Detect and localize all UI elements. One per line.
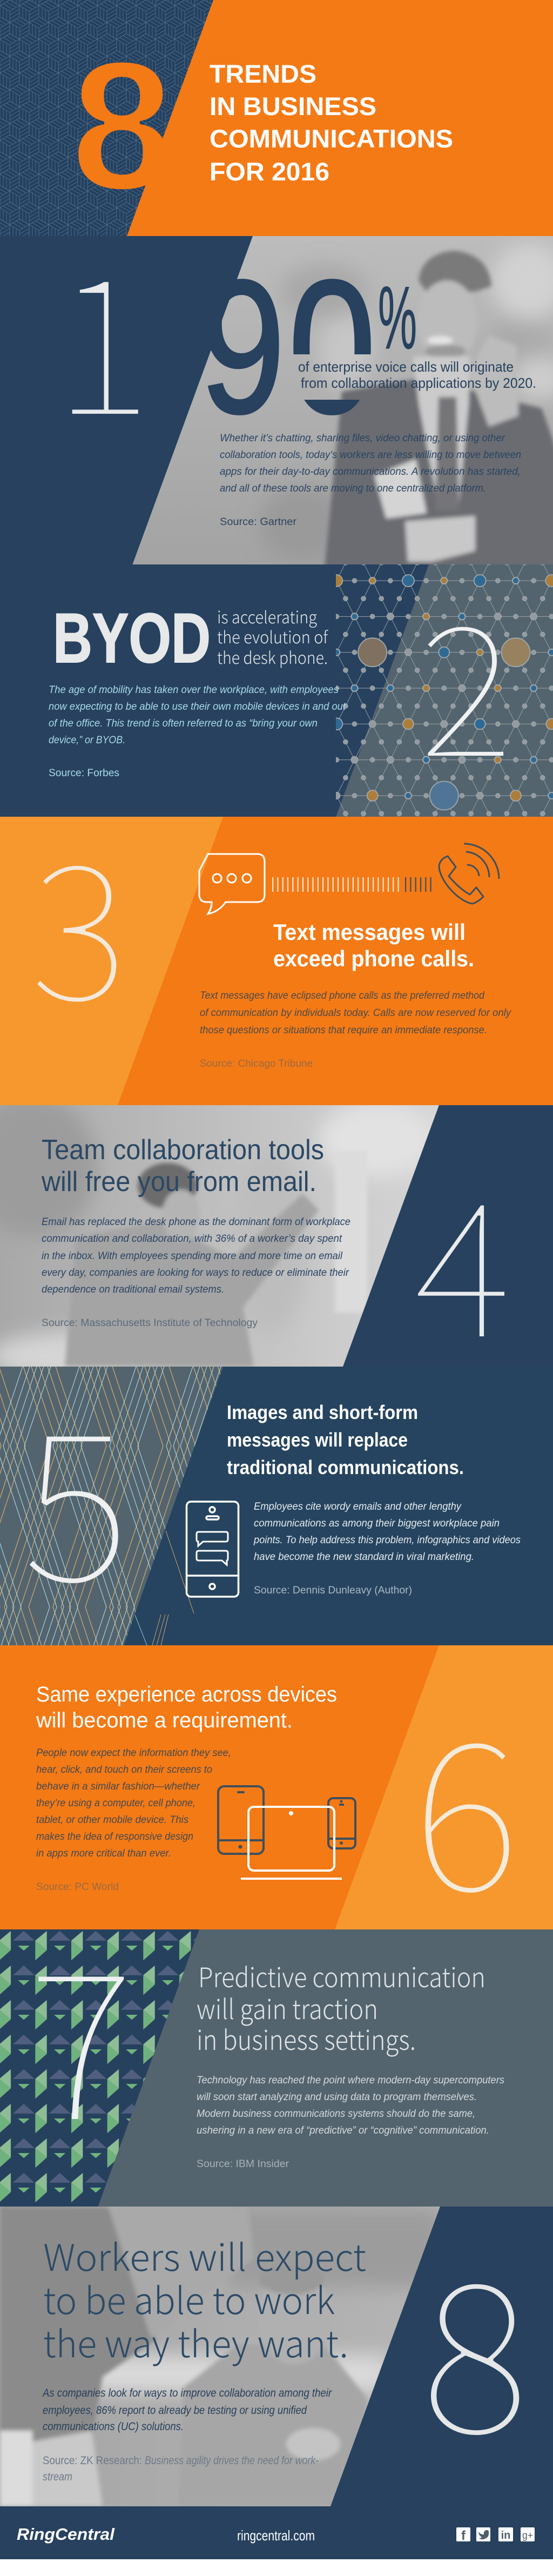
icon: linkedin (498, 2527, 513, 2541)
body text: collaboration tools, today’s workers are less willing to move between (220, 449, 521, 461)
navy diagonal panel (331, 2207, 553, 2506)
stray accent lines (135, 1531, 194, 1645)
body text (49, 684, 346, 746)
icon: facebook: f (461, 2528, 466, 2543)
heading: the desk phone. (217, 644, 328, 669)
body text: Technology has reached the point where modern-day supercomputers (197, 2074, 504, 2086)
heading: the way they want. (43, 2315, 348, 2368)
footer (0, 2506, 553, 2559)
BYOD wordmark: BYOD (53, 598, 211, 677)
source: Source: PC World (36, 1881, 119, 1893)
heading: Workers will expect (43, 2228, 366, 2282)
heading (217, 604, 329, 669)
photo: businessman on phone (133, 236, 553, 564)
signal bars (272, 877, 435, 892)
body text: Text messages have eclipsed phone calls as the preferred method (200, 990, 485, 1001)
triangle pattern panel (0, 1929, 199, 2207)
stat caption: of enterprise voice calls will originate (298, 359, 514, 375)
panel: trend 3 (0, 781, 553, 1105)
navy background (0, 1367, 553, 1645)
chevron line pattern (0, 1367, 227, 1645)
stat: 90 percent: 9 (200, 241, 285, 453)
title (210, 59, 453, 186)
icon: phone handset (439, 844, 499, 904)
photo: man at whiteboard (0, 1105, 439, 1367)
photo: two workers (0, 2207, 440, 2506)
numeral 4: 4 (414, 1118, 512, 1392)
body text (42, 1216, 350, 1295)
icon: chat bubble (199, 854, 265, 914)
body text: employees, 86% report to already be testing or using unified (43, 2404, 307, 2417)
orange title panel (127, 0, 553, 236)
numeral 3: 3 (30, 781, 128, 1055)
body text: People now expect the information they see, (36, 1747, 231, 1759)
body text: communications as among their biggest workplace pain (254, 1517, 500, 1529)
stat caption: from collaboration applications by 2020. (301, 375, 536, 391)
navy diagonal panel (343, 1105, 553, 1367)
body text: now expecting to be able to use their own mobile devices in and out (49, 701, 346, 712)
panel: trend 1: % (378, 268, 417, 367)
heading: will gain traction (197, 1988, 378, 2027)
heading: Text messages will (273, 919, 466, 945)
stat: 90 percent: 0 (288, 241, 376, 453)
stat: 90 percent (207, 279, 416, 415)
numeral 5: 5 (22, 1341, 130, 1642)
heading (227, 1401, 464, 1478)
source: Source: Dennis Dunleavy (Author) (254, 1584, 412, 1596)
orange background (0, 1645, 553, 1929)
body text: dependence on traditional email systems. (42, 1283, 224, 1295)
body text: they’re using a computer, cell phone, (36, 1797, 195, 1809)
title: COMMUNICATIONS (210, 124, 453, 153)
numeral 2: 2 (419, 546, 514, 810)
body text: communications (UC) solutions. (43, 2420, 184, 2433)
source: Source: Chicago Tribune (200, 1058, 313, 1070)
body text: in the inbox. With employees spending more and more time on email (42, 1250, 343, 1262)
title: FOR 2016 (210, 157, 329, 186)
icon: tablet, laptop and phone (218, 1786, 355, 1879)
icon: google plus (521, 2527, 535, 2541)
source: Source: Massachusetts Institute of Technology (42, 1317, 258, 1329)
panel: trend 1 (0, 236, 553, 564)
heading: to be able to work (43, 2271, 335, 2325)
heading: in business settings. (197, 2019, 416, 2058)
body text: communication and collaboration, with 36% of a worker’s day spent (42, 1233, 343, 1245)
body text: apps for their day-to-day communications. A revolution has started, (220, 466, 521, 477)
body text: The age of mobility has taken over the workplace, with employees (49, 684, 339, 696)
heading: exceed phone calls. (273, 946, 474, 971)
light orange diagonal panel (335, 1645, 553, 1929)
panel: trend 6 (0, 1645, 553, 1951)
panel: trend 4 (0, 1105, 553, 1367)
body text (42, 2387, 332, 2433)
heading (36, 1683, 337, 1732)
big number 8: 8 (71, 23, 173, 228)
body text: tablet, or other mobile device. This (36, 1814, 188, 1826)
body text (200, 990, 511, 1036)
source: stream (43, 2471, 72, 2483)
title: TRENDS (210, 59, 316, 88)
body text: Email has replaced the desk phone as the dominant form of workplace (42, 1216, 350, 1228)
body text: will soon start analyzing and using data to program themselves. (197, 2091, 477, 2103)
heading: is accelerating (217, 604, 317, 628)
body text: in apps more critical than ever. (36, 1847, 171, 1859)
heading: will become a requirement. (36, 1709, 293, 1732)
body text: Modern business communications systems should do the same, (197, 2108, 475, 2120)
panel: trend 8 (0, 2190, 553, 2506)
heading: traditional communications. (227, 1456, 464, 1478)
heading: Team collaboration tools (42, 1134, 324, 1166)
icon: google plus: g+ (522, 2530, 533, 2541)
body text: of the office. This trend is often referred to as “bring your own (49, 717, 318, 729)
body text: hear, click, and touch on their screens to (36, 1764, 212, 1775)
body text: of communication by individuals today. Calls are now reserved for only (200, 1007, 511, 1019)
numeral 1: 1 (53, 195, 152, 470)
source: Source: Forbes (49, 767, 119, 779)
icon: linkedin: in (501, 2530, 510, 2541)
heading: Predictive communication (198, 1956, 485, 1995)
footer bar (0, 2506, 553, 2559)
body text: and all of these tools are moving to one centralized platform. (220, 482, 486, 494)
source: Source: Gartner (220, 516, 297, 528)
slate background (0, 1929, 553, 2207)
body text: As companies look for ways to improve collaboration among their (42, 2387, 332, 2399)
icon: smartphone with chat bubbles (187, 1502, 239, 1597)
body text: behave in a similar fashion—whether (36, 1780, 200, 1792)
slate diagonal panel (336, 564, 553, 817)
body text: Whether it’s chatting, sharing files, video chatting, or using other (220, 432, 505, 444)
body text: every day, companies are looking for ways to reduce or eliminate their (42, 1267, 349, 1279)
body text: ushering in a new era of “predictive” or “cognitive” communication. (197, 2124, 489, 2136)
heading (197, 1956, 485, 2058)
body text: makes the idea of responsive design (36, 1831, 193, 1842)
body text: device,” or BYOB. (49, 734, 125, 746)
network pattern (331, 564, 553, 817)
source (43, 2454, 319, 2483)
heading: the evolution of (217, 624, 329, 648)
icon: facebook (456, 2527, 470, 2543)
body text (36, 1747, 231, 1859)
stat caption (298, 359, 536, 391)
panel: trend 7 (0, 1929, 553, 2207)
heading (41, 1134, 324, 1198)
heading (273, 919, 474, 971)
title: IN BUSINESS (210, 92, 376, 120)
navy background (0, 564, 553, 817)
light orange diagonal panel (0, 817, 223, 1105)
navy diagonal panel (0, 236, 253, 565)
heading: Same experience across devices (36, 1683, 337, 1706)
heading (43, 2228, 366, 2368)
body text: Employees cite wordy emails and other lengthy (254, 1501, 462, 1512)
body text: those questions or situations that require an immediate response. (200, 1024, 487, 1036)
logo: RingCentral (17, 2525, 115, 2544)
body text (253, 1501, 521, 1563)
source: Source: IBM Insider (197, 2158, 289, 2170)
website: ringcentral.com (237, 2527, 315, 2544)
panel: trend 2 (0, 546, 553, 817)
orange background (0, 817, 553, 1105)
heading: messages will replace (227, 1429, 408, 1451)
icon: twitter (476, 2527, 490, 2541)
numeral 8: 8 (421, 2190, 530, 2494)
source: Source: ZK Research: (43, 2454, 142, 2467)
panel: trend 5 (0, 1341, 553, 1645)
hexagon pattern background (0, 0, 553, 236)
slate diagonal panel (0, 1367, 223, 1645)
heading: will free you from email. (41, 1166, 316, 1198)
body text: points. To help address this problem, infographics and videos (253, 1534, 521, 1546)
heading: Images and short-form (227, 1401, 418, 1423)
source: Business agility drives the need for work- (145, 2454, 319, 2467)
numeral 7: 7 (28, 1882, 134, 2180)
numeral 6: 6 (412, 1651, 520, 1951)
body text: have become the new standard in viral marketing. (254, 1551, 474, 1563)
body text (220, 432, 521, 494)
panel: header (0, 0, 553, 236)
body text (197, 2074, 504, 2136)
